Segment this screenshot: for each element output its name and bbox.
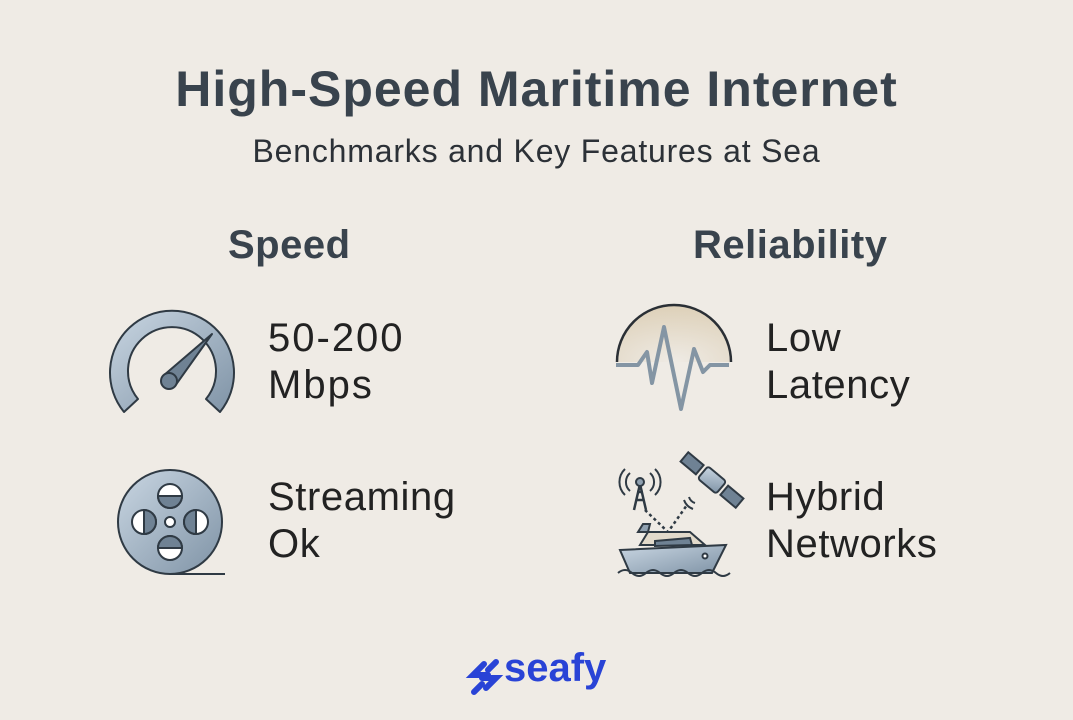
heading: reliability: Reliability: [693, 223, 887, 267]
icon: film reel: [118, 470, 225, 574]
text: low latency: Low: [766, 316, 841, 360]
title: High-Speed Maritime Internet: [175, 61, 898, 117]
text: streaming ok: Streaming: [268, 475, 456, 519]
text: 50-200 Mbps: [268, 316, 405, 407]
logo text: seafy: [504, 646, 606, 690]
text: hybrid networks: Hybrid: [766, 475, 885, 519]
text: hybrid networks: [766, 475, 938, 566]
text: low latency: [766, 316, 910, 407]
logo mark: [473, 662, 496, 692]
text: 50-200 Mbps: Mbps: [268, 363, 374, 407]
text: streaming ok: Ok: [268, 522, 320, 566]
icon: gauge: [110, 311, 234, 412]
icon: hybrid network: [618, 451, 745, 576]
icon: latency wave: [616, 305, 731, 409]
text: 50-200 Mbps: 50-200: [268, 316, 405, 360]
text: low latency: Latency: [766, 363, 910, 407]
subtitle: Benchmarks and Key Features at Sea: [253, 133, 820, 169]
text: streaming ok: [268, 475, 456, 566]
heading: speed: Speed: [228, 223, 351, 267]
text: hybrid networks: Networks: [766, 522, 938, 566]
